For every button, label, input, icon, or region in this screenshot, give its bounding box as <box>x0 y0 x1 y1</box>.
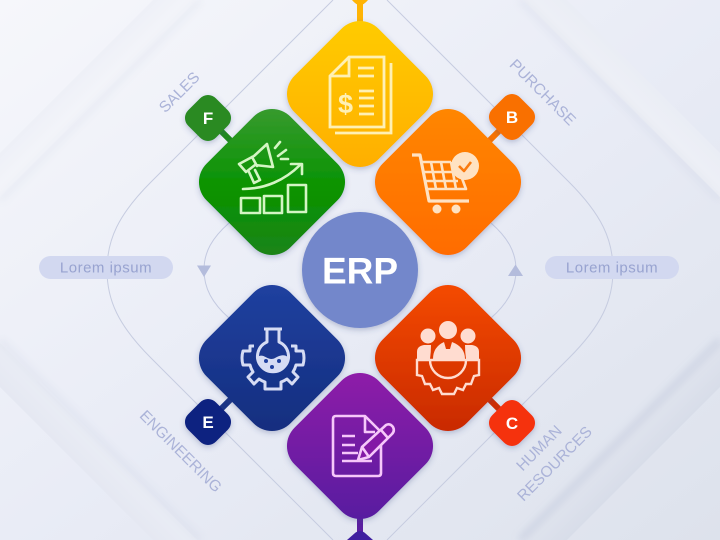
panel: yellow finance tile <box>287 21 433 167</box>
badge: E: E <box>202 413 214 432</box>
panel: red human resources tile <box>375 285 521 431</box>
panel: orange purchase tile <box>375 109 521 255</box>
badge: F <box>185 95 231 141</box>
badge: C: C <box>506 414 518 433</box>
badge: B: B <box>506 108 518 127</box>
inner cycle arcs <box>204 223 516 318</box>
icon: team with gear <box>417 321 479 394</box>
label: human resources: HUMAN <box>513 422 566 475</box>
label: human resources: RESOURCES <box>514 423 596 505</box>
pill: right <box>545 256 679 279</box>
icon: shopping cart with check <box>412 152 479 214</box>
label: sales: SALES <box>156 69 203 116</box>
panel: green sales tile <box>199 109 345 255</box>
pill: right: Lorem ipsum <box>566 260 658 276</box>
arrow: right cycle up <box>508 264 523 276</box>
badge: C <box>489 400 535 446</box>
badge: E <box>185 399 231 445</box>
badge: bottom (purple) <box>347 531 373 540</box>
badge: top (yellow) <box>352 0 368 5</box>
icon: megaphone and growth bars <box>239 142 306 213</box>
ERP hub <box>302 212 418 328</box>
pill: left: Lorem ipsum <box>60 260 152 276</box>
connector stems <box>219 0 501 534</box>
label: engineering: ENGINEERING <box>136 407 225 496</box>
label: purchase: PURCHASE <box>506 56 579 129</box>
outer connector line <box>107 0 613 540</box>
icon: document and pencil <box>333 416 394 476</box>
panel: blue engineering tile <box>199 285 345 431</box>
panel: purple documents tile <box>287 373 433 519</box>
badge: B <box>489 94 535 140</box>
pill: left <box>39 256 173 279</box>
badge: F: F <box>203 109 213 128</box>
arrow: left cycle down <box>197 266 211 277</box>
icon: invoice document <box>330 57 391 133</box>
ERP hub: ERP <box>322 250 398 292</box>
icon: flask in gear <box>242 329 304 389</box>
icon: invoice document: $ <box>338 89 353 119</box>
